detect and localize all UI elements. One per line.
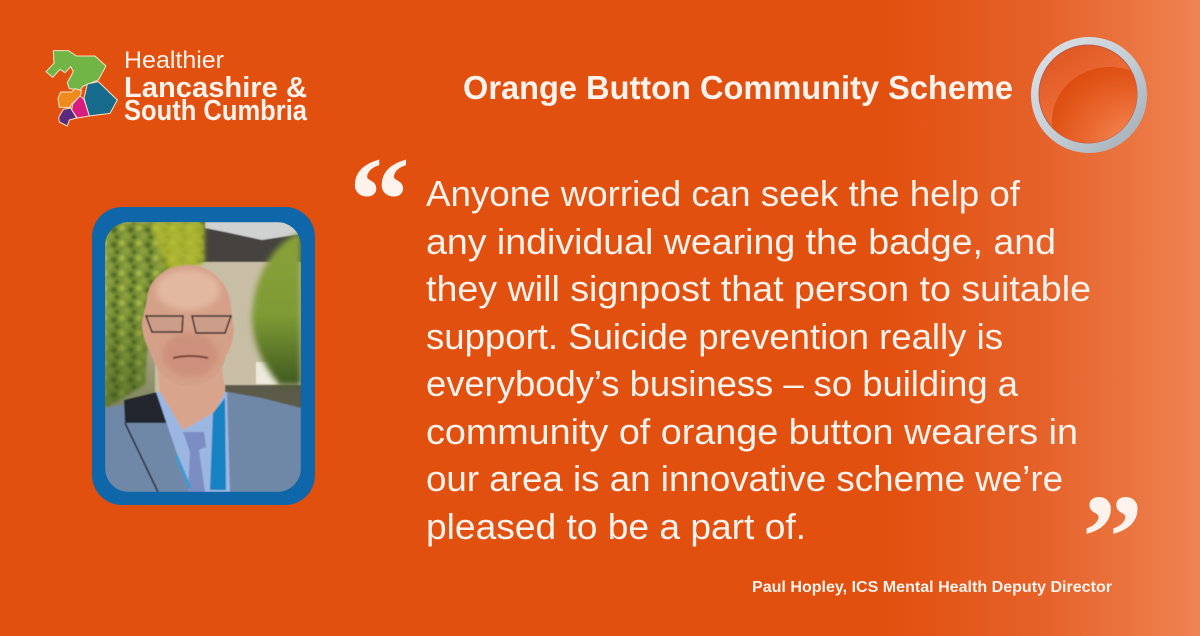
logo: Healthier Lancashire & South Cumbria <box>46 47 308 127</box>
quote text: our area is an innovative scheme we’re <box>426 458 1063 499</box>
lanyard <box>210 398 226 490</box>
quote text: community of orange button wearers in <box>426 411 1078 452</box>
quote text: everybody’s business – so building a <box>426 363 1019 404</box>
quote text: any individual wearing the badge, and <box>426 221 1056 262</box>
logo wordmark: South Cumbria <box>124 95 308 127</box>
shirt <box>156 392 230 492</box>
quote text: Anyone worried can seek the help of <box>426 173 1021 214</box>
portrait photo with blue frame <box>92 207 315 505</box>
quote text <box>426 173 1091 547</box>
icon: region map <box>46 51 117 126</box>
closing quote mark: ” <box>1082 470 1143 605</box>
hedge left <box>105 222 204 408</box>
logo wordmark: Healthier <box>124 47 224 74</box>
building eaves and wall <box>200 222 301 410</box>
logo wordmark <box>124 47 308 127</box>
tie <box>183 432 206 492</box>
shrub right <box>252 232 301 385</box>
attribution: Paul Hopley, ICS Mental Health Deputy Director <box>752 579 1112 596</box>
heading: Orange Button Community Scheme <box>463 69 1013 106</box>
quote text: support. Suicide prevention really is <box>426 316 1003 357</box>
quote text: they will signpost that person to suitable <box>426 268 1091 309</box>
quote text: pleased to be a part of. <box>426 506 806 547</box>
jacket <box>105 392 301 492</box>
neck <box>158 368 225 430</box>
head <box>142 265 234 386</box>
logo wordmark: Lancashire & <box>124 72 307 104</box>
glasses <box>146 316 231 333</box>
opening quote mark: “ <box>349 133 410 268</box>
icon: orange button badge <box>1031 37 1147 153</box>
